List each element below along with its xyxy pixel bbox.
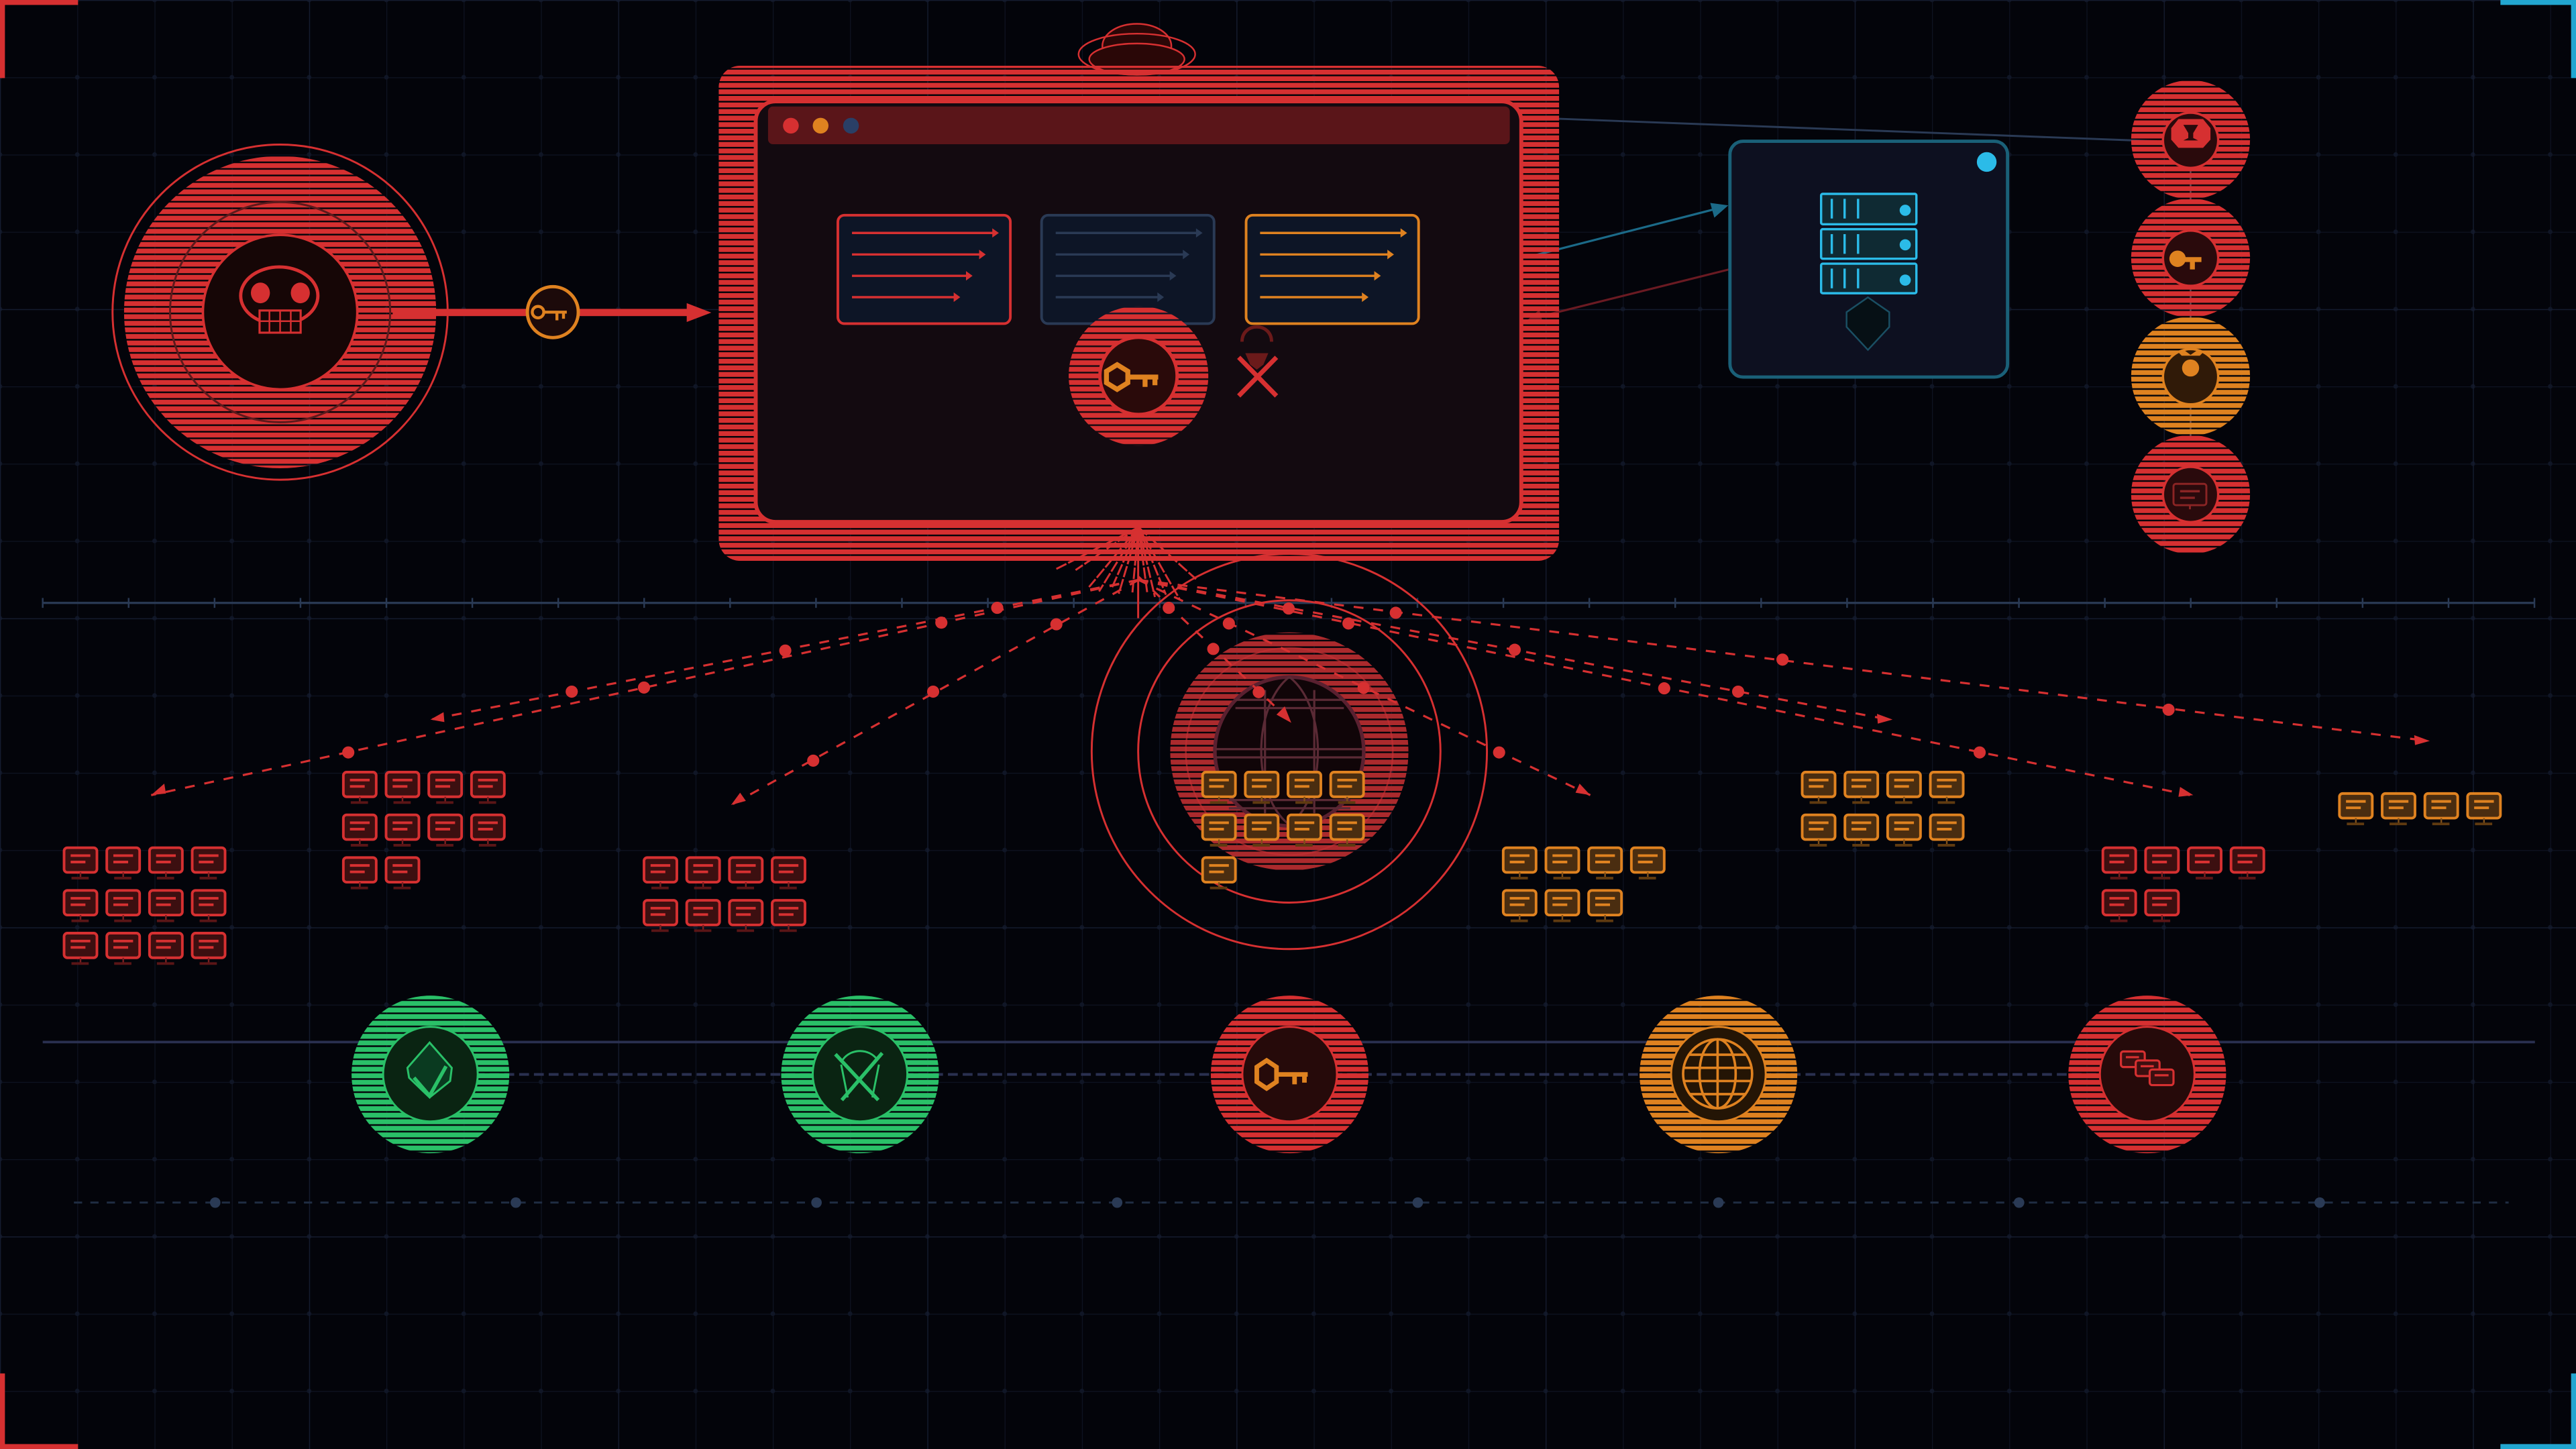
red return arrow from server [1528, 270, 1729, 322]
key token on arrow [527, 286, 578, 337]
inner ring [1186, 648, 1393, 855]
icon: skull [241, 267, 318, 333]
route waypoint dots [342, 602, 2175, 767]
striped frame [718, 66, 1559, 561]
device group 6 (orange) [1803, 772, 1964, 845]
dashed connector through status nodes [431, 1074, 2147, 1075]
status node: globe [1640, 996, 1797, 1153]
icon: key [1256, 1061, 1307, 1088]
status node: linked devices [2068, 996, 2226, 1153]
status dot [1977, 152, 1996, 172]
globe icon [1215, 677, 1364, 826]
corner bracket: bottom left [3, 1373, 78, 1446]
right node: key [2131, 199, 2250, 317]
right chain connectors [2190, 168, 2191, 437]
corner bracket: top left [3, 3, 78, 78]
dark lines from dashboard to server [1546, 118, 2157, 142]
dashboard window [718, 66, 1559, 561]
device group 2 (red) [343, 772, 504, 888]
device group 1 (red) [64, 848, 225, 963]
title bar [768, 107, 1510, 144]
icon: solid skull [2171, 119, 2210, 148]
central globe target [1091, 554, 1487, 949]
card: navy arrows [1042, 215, 1214, 323]
upper timeline with ticks [43, 598, 2535, 608]
status node: key [1211, 996, 1368, 1153]
right node: monitor [2131, 435, 2250, 554]
icon: crossed swords [835, 1051, 882, 1100]
icon: person [2177, 351, 2205, 376]
device group 8 (orange) [2339, 794, 2500, 824]
card: red arrows [838, 215, 1010, 323]
right node: skull [2131, 80, 2250, 199]
card: orange arrows [1246, 215, 1419, 323]
red arrow: attacker to dashboard [392, 303, 711, 322]
corner bracket: bottom right [2500, 1373, 2573, 1446]
cloud hat above dashboard [1079, 24, 1195, 74]
status node: crossed shield [781, 996, 939, 1153]
icon: key [1106, 365, 1159, 389]
status node: shield check [352, 996, 509, 1153]
icon: key [2169, 250, 2202, 270]
key disk [1069, 306, 1208, 445]
denied lock with red cross [1239, 327, 1277, 396]
icon: shield with check [407, 1042, 451, 1097]
server panel [1730, 142, 2008, 377]
outer range ring [1091, 554, 1487, 949]
icon: shield [1847, 297, 1889, 350]
right node: user alert [2131, 317, 2250, 435]
middle range ring [1138, 600, 1440, 902]
attacker skull node [113, 145, 447, 480]
bottom dashed track with nodes [74, 1197, 2509, 1208]
device group 3 (red) [644, 857, 805, 930]
cyan arrow to server [1527, 203, 1728, 258]
device group 5 (orange) [1503, 848, 1664, 921]
icon: globe [1683, 1039, 1752, 1108]
striped disk [1170, 633, 1409, 871]
device group 7 (red) [2103, 848, 2264, 921]
device group 4 (orange) [1203, 772, 1364, 888]
icon: monitor [2174, 484, 2206, 509]
window dots [783, 118, 859, 133]
corner bracket: top right [2500, 3, 2573, 78]
attack routes: dashed arrows with waypoint dots [151, 577, 2430, 805]
icon: chain of monitors [2121, 1051, 2174, 1085]
burst of rays below dashboard [1057, 527, 1196, 619]
route arrowheads [151, 706, 2430, 805]
icon: server rack [1821, 194, 1917, 293]
lower rail line [43, 1041, 2535, 1042]
